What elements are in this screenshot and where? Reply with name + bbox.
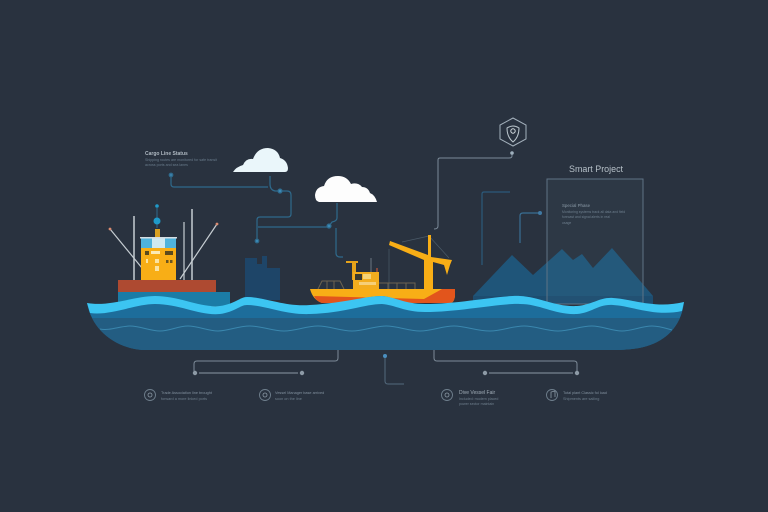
antenna beacon [154,204,160,238]
masts and rigging [109,209,218,280]
railings [318,281,415,289]
icon [144,390,156,400]
panel text: Monitoring systems track all data and field [562,210,625,214]
footer item 3: Included: modern placed [459,397,498,401]
mountains [473,248,653,304]
footer item 1 [144,390,213,401]
top left text block: Cargo Line Status [145,151,188,157]
hull upper [310,289,455,303]
footer item 4: Total plant Classic fol load [563,391,607,395]
infographic canvas [87,118,684,406]
hull lower red [314,289,455,303]
city silhouette [245,256,280,300]
panel text [562,203,625,225]
containers [118,280,216,292]
light wave band [87,296,684,314]
small mast [346,261,358,280]
top left text block: Shipping routes are monitored for safe transit [145,158,217,162]
footer item 1: Trade Association line brought [161,391,213,395]
crane rigging [389,236,449,290]
superstructure [141,248,176,280]
cloud 1 [233,148,288,172]
top left text block: across ports and sea lanes [145,163,188,167]
hull [118,292,230,306]
footer item 2: Vessel Manager base arrived [275,391,324,395]
footer item 2: soon on the line [275,397,302,401]
wave line [100,326,672,331]
connector from hexagon [434,151,514,229]
connector lines: right network [482,192,542,265]
panel text: Special Phase [562,203,591,208]
icon [260,390,270,400]
footer item 3: power sector maintain [459,402,494,406]
sea hull [80,296,690,352]
cloud 2 [315,176,377,202]
connector lines: left network [169,173,343,257]
top left text block [145,151,217,167]
panel heading: Smart Project [569,164,623,174]
footer item 3 [442,390,498,406]
icon [546,390,558,400]
panel text: forecast and signal alerts in real [562,215,610,219]
footer item 1: forward a more linked ports [161,397,207,401]
footer item 4 [546,390,607,401]
panel: smart project box [547,179,643,304]
footer item 4: Shipments are sailing [563,397,599,401]
bridge windows [141,238,176,248]
tug ship with crane [310,235,455,303]
hexagon location icon [500,118,526,146]
footer item 2 [260,390,324,401]
crane [389,235,452,290]
panel text: usage [562,221,571,225]
cabin [353,272,379,290]
connector lines below hull [193,350,579,384]
cargo ship [109,204,230,306]
footer item 3: Dive Vessel Fair [459,390,495,396]
icon [442,390,452,400]
